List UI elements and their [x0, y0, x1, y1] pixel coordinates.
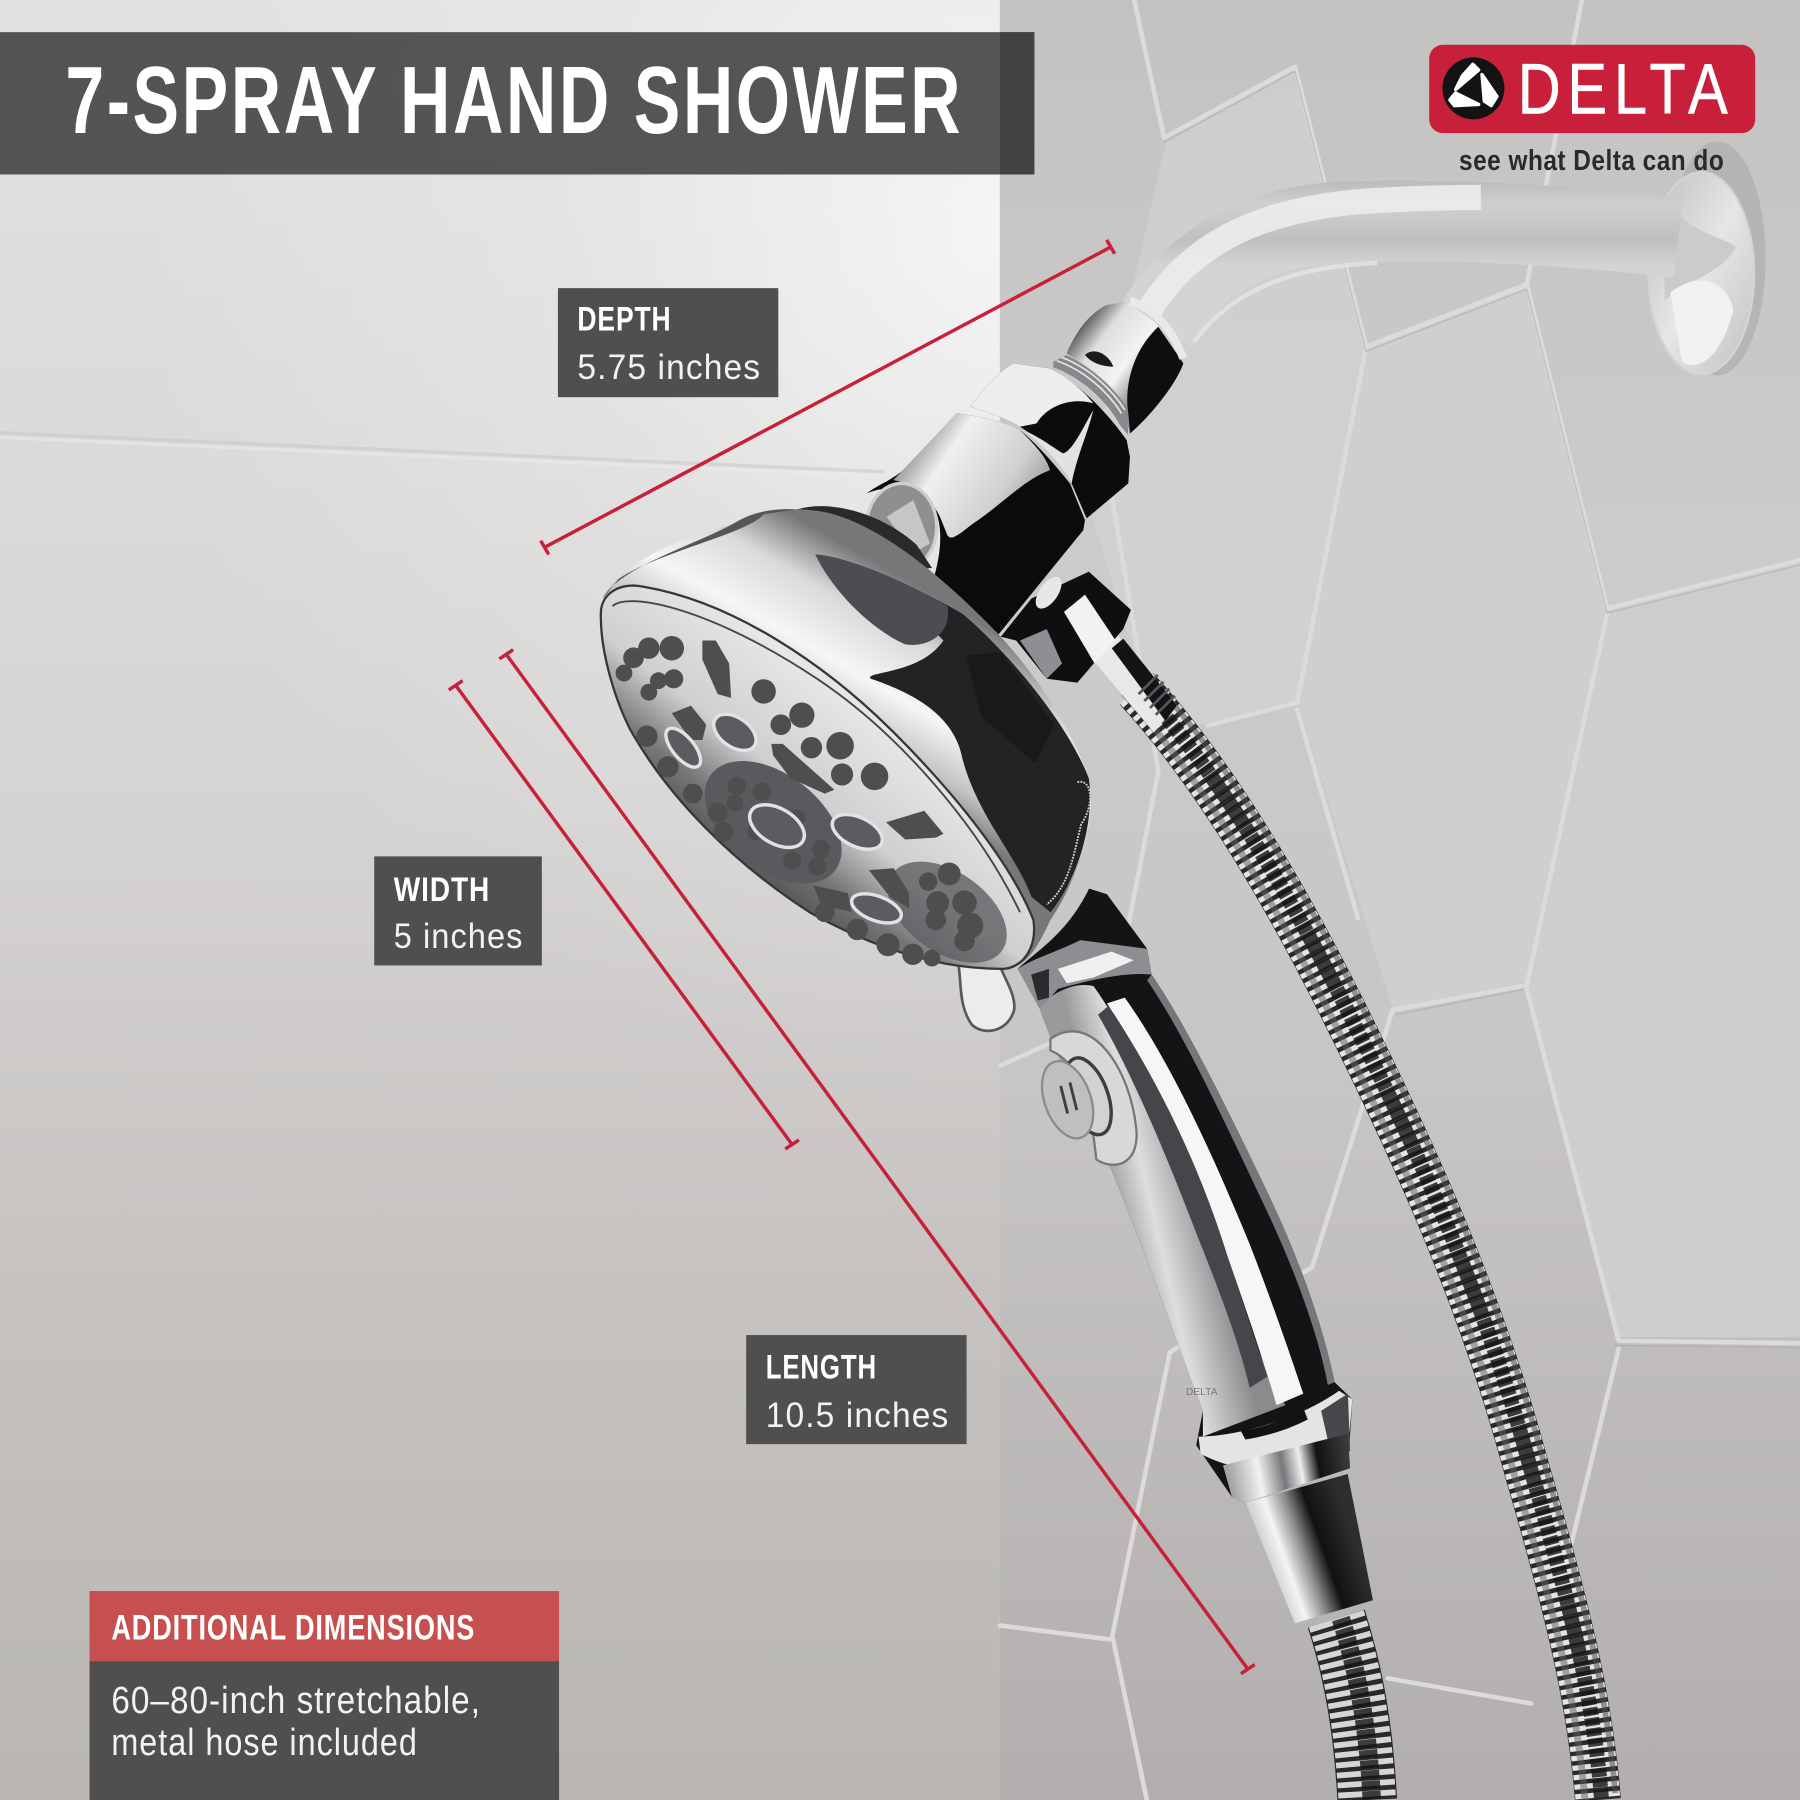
panel heading: ADDITIONAL DIMENSIONS	[111, 1607, 475, 1647]
dimension line: depth	[541, 240, 1115, 554]
dimension line: length	[499, 650, 1255, 1674]
label: length: 10.5 inches	[766, 1395, 949, 1435]
panel: additional dimensions	[90, 1591, 559, 1800]
arm tube	[1148, 197, 1678, 342]
label: width	[374, 856, 542, 965]
panel body	[90, 1661, 559, 1800]
logo mark	[1442, 57, 1504, 119]
neck band	[1018, 940, 1152, 1009]
ball joint	[867, 483, 937, 570]
lever	[957, 956, 1014, 1031]
upper swivel body	[970, 363, 1130, 518]
logo tagline: see what Delta can do	[1459, 145, 1724, 177]
shower head	[601, 506, 1091, 1031]
logo: Delta	[1429, 45, 1755, 177]
nozzles	[616, 636, 983, 967]
shower hand grip and lower hose	[1018, 889, 1373, 1800]
seam on shell	[1047, 782, 1090, 905]
background: hexagonal tile wall	[1000, 0, 1800, 1800]
cone fitting	[1246, 1474, 1373, 1623]
title text: 7-SPRAY HAND SHOWER	[65, 48, 963, 154]
handle body	[1018, 889, 1352, 1503]
head shell	[603, 509, 1091, 970]
spray face	[601, 586, 1034, 969]
lower swivel body	[867, 413, 1085, 637]
label: length: LENGTH	[766, 1349, 877, 1387]
hose connector	[1001, 572, 1177, 732]
wall flange	[1648, 141, 1766, 375]
panel body: 60–80-inch stretchable,	[111, 1680, 481, 1722]
engraved mark: DELTA	[1186, 1387, 1218, 1398]
collar ring	[1198, 1391, 1352, 1471]
label: width: 5 inches	[394, 916, 523, 956]
panel body: metal hose included	[111, 1722, 418, 1764]
dark reflection on shell	[815, 554, 1090, 912]
chrome ring jets	[660, 707, 905, 929]
lower hose	[1336, 1619, 1372, 1800]
label: depth: 5.75 inches	[577, 347, 761, 387]
panel heading	[90, 1591, 559, 1661]
spray button	[1032, 1052, 1120, 1145]
logo wordmark: DELTA	[1518, 51, 1735, 130]
label: length	[746, 1335, 967, 1444]
back rubber ring	[794, 506, 932, 572]
shower arm and wall flange	[1148, 141, 1766, 375]
dimension line: width	[449, 681, 799, 1149]
center ring area	[682, 736, 864, 908]
label: depth	[558, 288, 778, 397]
lower-right reflection	[869, 841, 1025, 984]
button recess	[1050, 1031, 1137, 1165]
label: depth: DEPTH	[577, 301, 672, 339]
threaded collar	[1053, 301, 1183, 435]
swivel mount and ball joint	[867, 301, 1183, 637]
label: width: WIDTH	[394, 871, 490, 909]
hand shower hose	[1124, 682, 1615, 1800]
title bar	[0, 32, 1034, 174]
background: left wall	[0, 0, 1000, 1800]
